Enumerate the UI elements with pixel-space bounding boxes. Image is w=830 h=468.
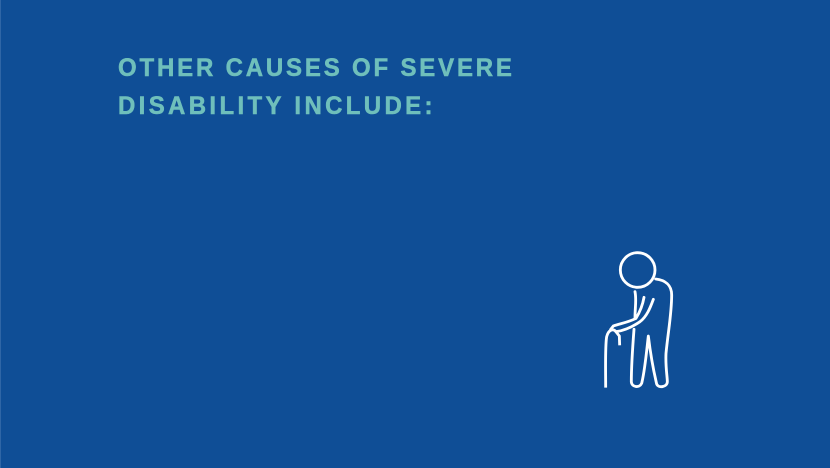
title: OTHER CAUSES OF SEVERE (118, 53, 515, 82)
title: DISABILITY INCLUDE: (118, 91, 436, 120)
title (118, 53, 515, 120)
icon: elderly person with walking cane (604, 251, 674, 388)
